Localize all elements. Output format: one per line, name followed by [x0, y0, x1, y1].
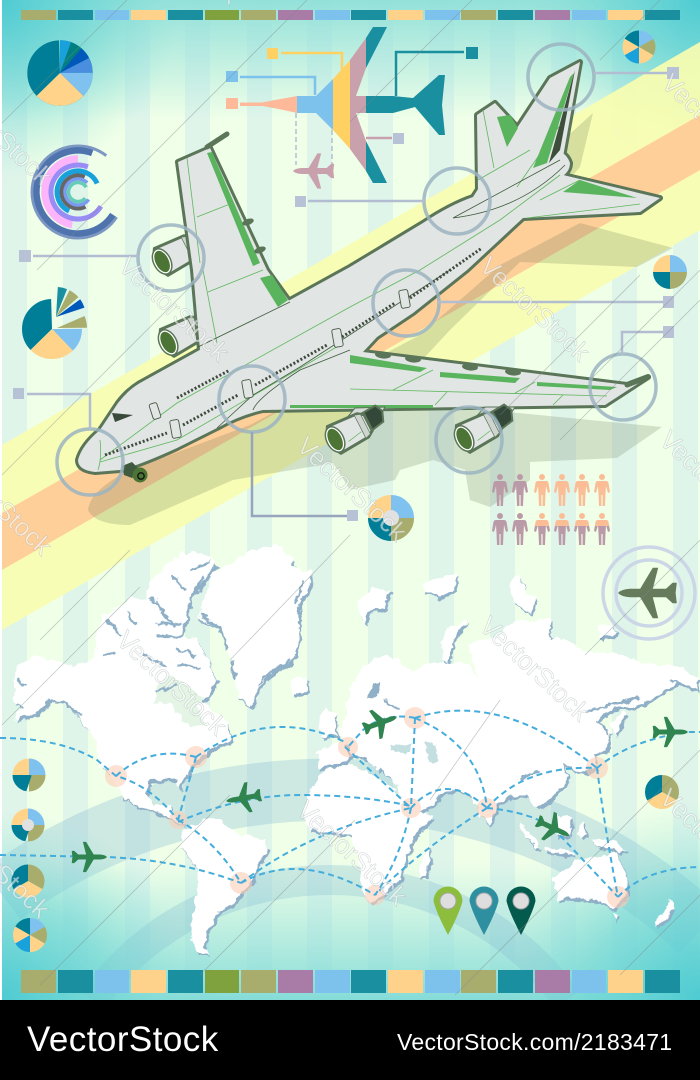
far wing engine one [148, 231, 202, 279]
doors [149, 289, 410, 439]
people icons [492, 474, 610, 545]
pie chart: right of map [654, 784, 670, 800]
callout connectors [27, 73, 667, 516]
footer bar [0, 1000, 700, 1080]
icon diagram: segmented plane with legend [226, 27, 478, 189]
watermark overlay: VectorStock [474, 250, 597, 368]
donut chart near plane [380, 506, 402, 530]
donut two [20, 817, 36, 833]
pie one [21, 767, 37, 783]
airliner illustration [78, 62, 660, 482]
left pie column [20, 767, 38, 944]
nose gear [122, 462, 148, 482]
green planes on routes [72, 703, 688, 872]
near wing engine four [450, 400, 520, 456]
plane shadow [88, 113, 673, 525]
inland water and channels [17, 562, 695, 780]
footer image id: VectorStock.com/2183471 [397, 1029, 672, 1055]
panel lines [98, 110, 640, 470]
pie three [20, 873, 36, 889]
pie chart: right quadrant [662, 264, 678, 280]
tail dark strip [549, 70, 575, 163]
route hubs [105, 707, 629, 908]
watermark overlay: VectorStock [111, 624, 234, 742]
far wing engine two [154, 312, 208, 360]
bottom colour bar [21, 970, 680, 993]
top colour bar [21, 10, 680, 20]
callout circles [57, 44, 656, 495]
pie chart: top right [631, 39, 647, 55]
plane target icon [603, 547, 695, 639]
watermark overlay: VectorStock [291, 794, 414, 912]
watermark overlay: VectorStock [291, 430, 414, 548]
footer brand: VectorStock [27, 1020, 219, 1059]
pin: green [434, 886, 462, 935]
world map [13, 545, 700, 958]
pin: teal [470, 886, 498, 935]
diagonal colour bands [2, 42, 700, 630]
near wing engine three [321, 401, 391, 457]
wing fairings [241, 217, 521, 376]
pie four [22, 926, 38, 944]
exploded pie chart [37, 302, 72, 344]
pin: dark green [506, 886, 536, 935]
watermark overlay: VectorStock [113, 250, 236, 368]
map pins [434, 886, 536, 935]
cockpit windows [112, 413, 133, 422]
flight routes [0, 711, 700, 897]
fairing outlines [198, 160, 565, 428]
concentric arc chart [14, 128, 142, 256]
windows [105, 248, 482, 455]
callout squares [13, 67, 679, 521]
watermark overlay: VectorStock [474, 610, 597, 728]
pie chart: top left [44, 57, 76, 89]
engine pylons [345, 407, 515, 420]
wing and tail green panels [207, 73, 637, 408]
airframe silhouette [78, 62, 660, 472]
